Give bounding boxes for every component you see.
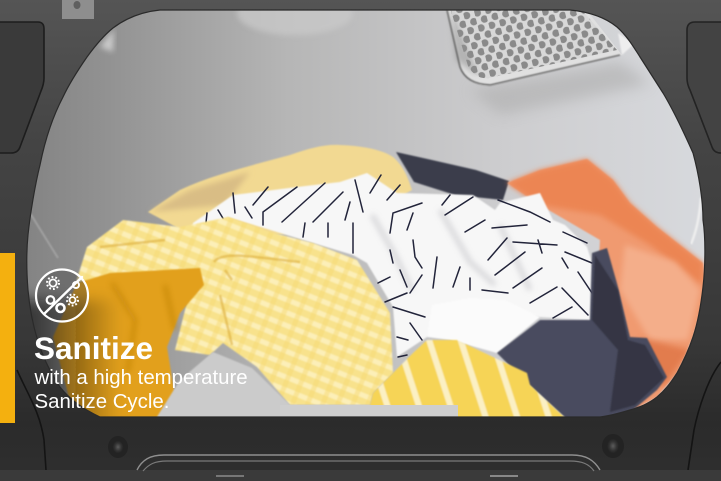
grey white cloth <box>156 352 370 416</box>
navy shirt, top <box>396 152 509 200</box>
icon: sanitize germs crossed out <box>36 270 88 322</box>
right side panel recess <box>687 22 721 153</box>
handle ridge <box>137 455 600 477</box>
cream towel <box>148 145 412 240</box>
checked fabric fold lines <box>100 240 300 345</box>
orange highlight <box>620 245 700 340</box>
shirt stripes <box>205 175 592 357</box>
shirt fold shading <box>372 210 530 290</box>
door opening rim <box>27 10 705 417</box>
mustard garment <box>53 268 204 420</box>
navy shirt, bottom <box>497 248 667 420</box>
cream towel shading <box>150 172 250 212</box>
vent grille <box>446 8 634 86</box>
top latch plate <box>62 0 94 19</box>
laundry pile <box>53 145 706 420</box>
lower left seam <box>17 370 46 470</box>
checked yellow fabric, left <box>76 217 393 405</box>
dark wash behind caption <box>29 291 116 416</box>
right bolt <box>602 434 624 458</box>
mustard fold shading <box>112 283 175 372</box>
plain white fabric <box>427 298 540 353</box>
bottom ledge <box>0 470 721 481</box>
orange darker upper fold <box>507 159 703 285</box>
left drum rim <box>30 213 58 258</box>
navy shirt shadow <box>592 255 664 412</box>
accent bar <box>0 253 15 423</box>
vent shadow <box>470 62 650 115</box>
striped white shirt <box>193 173 592 357</box>
orange shadow <box>640 338 690 385</box>
orange shirt <box>507 159 706 420</box>
lower right seam <box>688 362 721 470</box>
left bolt <box>108 436 128 458</box>
body text line 2: Sanitize Cycle. <box>34 391 169 413</box>
door opening: drum interior <box>27 10 704 416</box>
lower shelf <box>290 405 458 416</box>
body text: with a high temperature <box>34 367 248 389</box>
right drum rim <box>691 198 701 244</box>
left side panel recess <box>0 22 44 153</box>
banded yellow fabric <box>368 340 567 420</box>
heading: Sanitize <box>34 330 153 366</box>
top round highlight <box>237 10 350 34</box>
left glint <box>100 29 114 52</box>
